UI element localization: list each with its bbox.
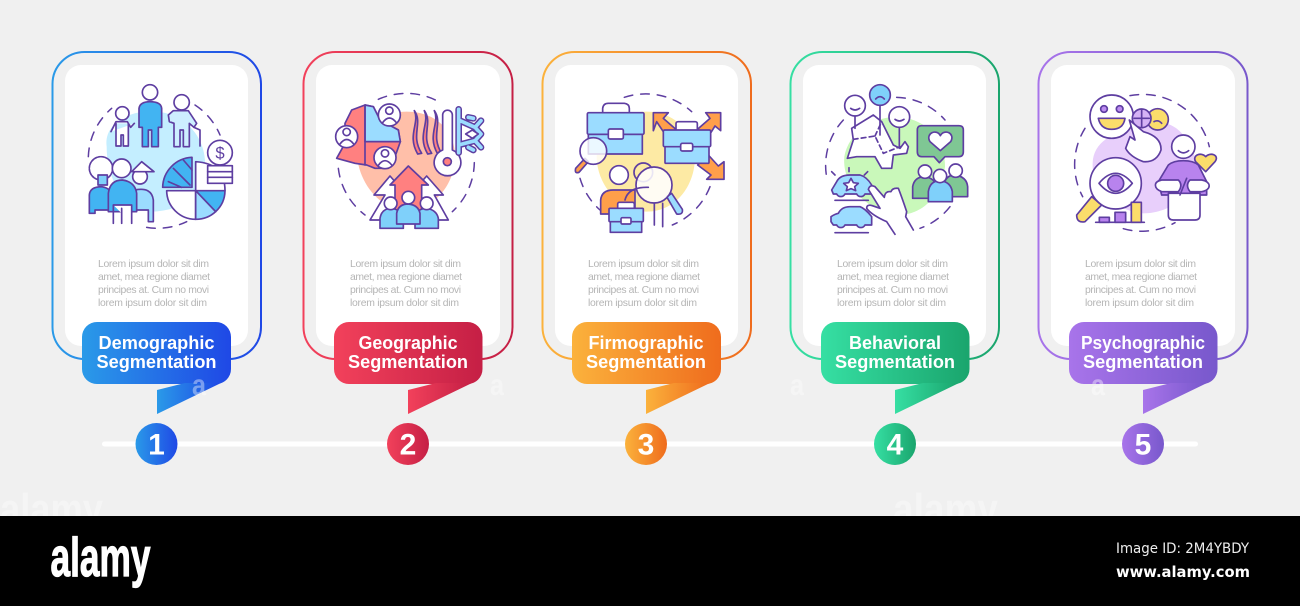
panel: behavioral segmentation xyxy=(790,52,999,465)
label: demographic xyxy=(82,322,231,414)
description text: lorem ipsum dolor sit dim xyxy=(588,298,697,309)
step number 3: 3 xyxy=(638,428,654,462)
description text: lorem ipsum dolor sit dim xyxy=(1085,298,1194,309)
description text: Lorem ipsum dolor sit dim xyxy=(837,259,948,270)
footer bar xyxy=(0,516,1300,606)
website: www.alamy.com xyxy=(1116,563,1250,581)
step number 3 xyxy=(625,423,667,465)
watermark marks: a xyxy=(490,369,504,402)
description text: principes at. Cum no movi xyxy=(1085,285,1196,296)
step number 1 xyxy=(136,423,178,465)
description text: amet, mea regione diamet xyxy=(1085,272,1197,283)
watermark marks: a xyxy=(790,369,804,402)
description text: amet, mea regione diamet xyxy=(350,272,462,283)
watermark marks: alamy xyxy=(893,485,998,534)
description text: amet, mea regione diamet xyxy=(588,272,700,283)
step number 4 xyxy=(874,423,916,465)
label: demographic: Demographic xyxy=(98,333,214,353)
footer logo: alamy xyxy=(50,526,151,588)
label: firmographic: Segmentation xyxy=(586,352,706,372)
panel: demographic segmentation xyxy=(52,52,261,465)
timeline line xyxy=(102,442,1198,446)
icon: demographic xyxy=(88,85,232,228)
description text: Lorem ipsum dolor sit dim xyxy=(588,259,699,270)
step number 4: 4 xyxy=(887,428,904,462)
description text: Lorem ipsum dolor sit dim xyxy=(350,259,461,270)
label: psychographic: Psychographic xyxy=(1081,333,1205,353)
icon: demographic: $ xyxy=(215,144,225,163)
label: geographic: Segmentation xyxy=(348,352,468,372)
description text: principes at. Cum no movi xyxy=(837,285,948,296)
description text: amet, mea regione diamet xyxy=(98,272,210,283)
description text: amet, mea regione diamet xyxy=(837,272,949,283)
description text: principes at. Cum no movi xyxy=(588,285,699,296)
label: behavioral: Behavioral xyxy=(849,333,941,353)
description text: principes at. Cum no movi xyxy=(98,285,209,296)
description text: lorem ipsum dolor sit dim xyxy=(98,298,207,309)
step number 5 xyxy=(1122,423,1164,465)
description text: lorem ipsum dolor sit dim xyxy=(837,298,946,309)
icon: geographic xyxy=(336,93,481,228)
watermark marks xyxy=(0,369,1105,534)
step number 2: 2 xyxy=(400,428,416,462)
description text: Lorem ipsum dolor sit dim xyxy=(98,259,209,270)
label: psychographic: Segmentation xyxy=(1083,352,1203,372)
label: demographic: Segmentation xyxy=(96,352,216,372)
panel: geographic segmentation xyxy=(304,52,512,465)
step number 1: 1 xyxy=(148,428,165,462)
watermark marks: a xyxy=(192,369,206,402)
label: behavioral: Segmentation xyxy=(835,352,955,372)
label: behavioral xyxy=(821,322,970,414)
image id: Image ID: 2M4YBDY xyxy=(1116,541,1249,557)
icon: firmographic xyxy=(575,94,724,232)
step number 2 xyxy=(387,423,429,465)
panel: firmographic segmentation xyxy=(542,52,751,465)
label: firmographic xyxy=(572,322,721,414)
label: firmographic: Firmographic xyxy=(588,333,704,353)
description text: principes at. Cum no movi xyxy=(350,285,461,296)
step number 5: 5 xyxy=(1135,428,1151,462)
label: psychographic xyxy=(1069,322,1218,414)
icon: psychographic xyxy=(1075,94,1216,231)
label: geographic xyxy=(334,322,482,414)
icon: behavioral xyxy=(826,85,968,234)
watermark marks: a xyxy=(1091,369,1105,402)
watermark marks: alamy xyxy=(0,485,103,534)
label: geographic: Geographic xyxy=(358,333,458,353)
description text: lorem ipsum dolor sit dim xyxy=(350,298,459,309)
panel: psychographic segmentation xyxy=(1038,52,1248,465)
description text: Lorem ipsum dolor sit dim xyxy=(1085,259,1196,270)
